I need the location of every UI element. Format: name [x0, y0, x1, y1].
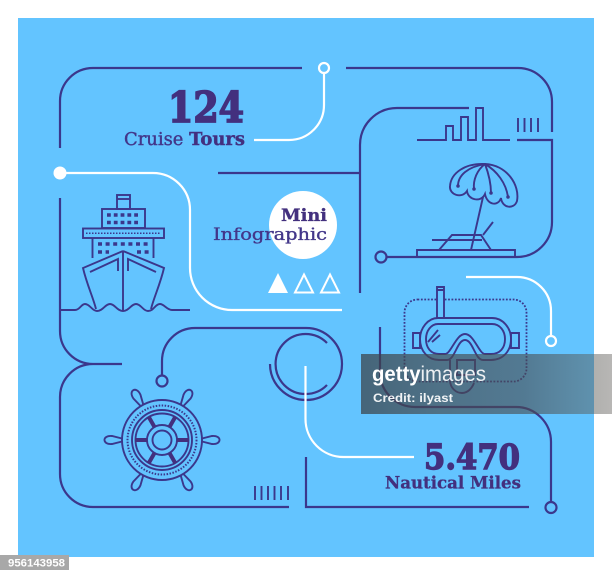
- node: beach circle: [376, 252, 386, 262]
- white title circle: [269, 191, 337, 259]
- watermark band: [361, 354, 612, 414]
- umbrella rib dots: [458, 186, 508, 197]
- icon: cruise ship: [83, 195, 164, 310]
- wheel spokes: [135, 416, 189, 464]
- icon: bar chart: [417, 108, 510, 140]
- stat: nautical miles: 5.470: [424, 438, 520, 478]
- image id badge: 956143958: [8, 558, 65, 570]
- icon: beach umbrella and lounger: [417, 164, 517, 257]
- water line: [60, 304, 190, 311]
- stat: 124 cruise tours: 124: [168, 83, 244, 133]
- node: top circle: [319, 63, 329, 73]
- tick marks: four: [518, 118, 538, 132]
- title: Mini: [281, 206, 327, 225]
- node: bottom right circle: [546, 502, 556, 513]
- stat: nautical miles: [385, 438, 521, 494]
- icon: diving mask: [404, 287, 526, 393]
- tick marks: six: [255, 486, 288, 500]
- connector lines: white: [66, 73, 551, 457]
- stat: 124 cruise tours: [124, 83, 245, 150]
- watermark band: gettyimages: [372, 362, 486, 386]
- icon: ship wheel: [104, 388, 220, 492]
- stat: 124 cruise tours: Cruise Tours: [124, 130, 245, 150]
- connector lines: navy: [60, 68, 552, 507]
- wheel handles: [202, 436, 220, 444]
- node: wheel circle: [156, 376, 168, 386]
- title: Infographic: [213, 225, 327, 245]
- node: white dot: [54, 166, 66, 180]
- watermark band: Credit: ilyast: [373, 391, 453, 405]
- triangles: [268, 273, 339, 293]
- title: [213, 206, 327, 245]
- image id badge: [0, 555, 69, 570]
- node: white ring: [546, 336, 556, 346]
- stat: nautical miles: Nautical Miles: [385, 474, 521, 494]
